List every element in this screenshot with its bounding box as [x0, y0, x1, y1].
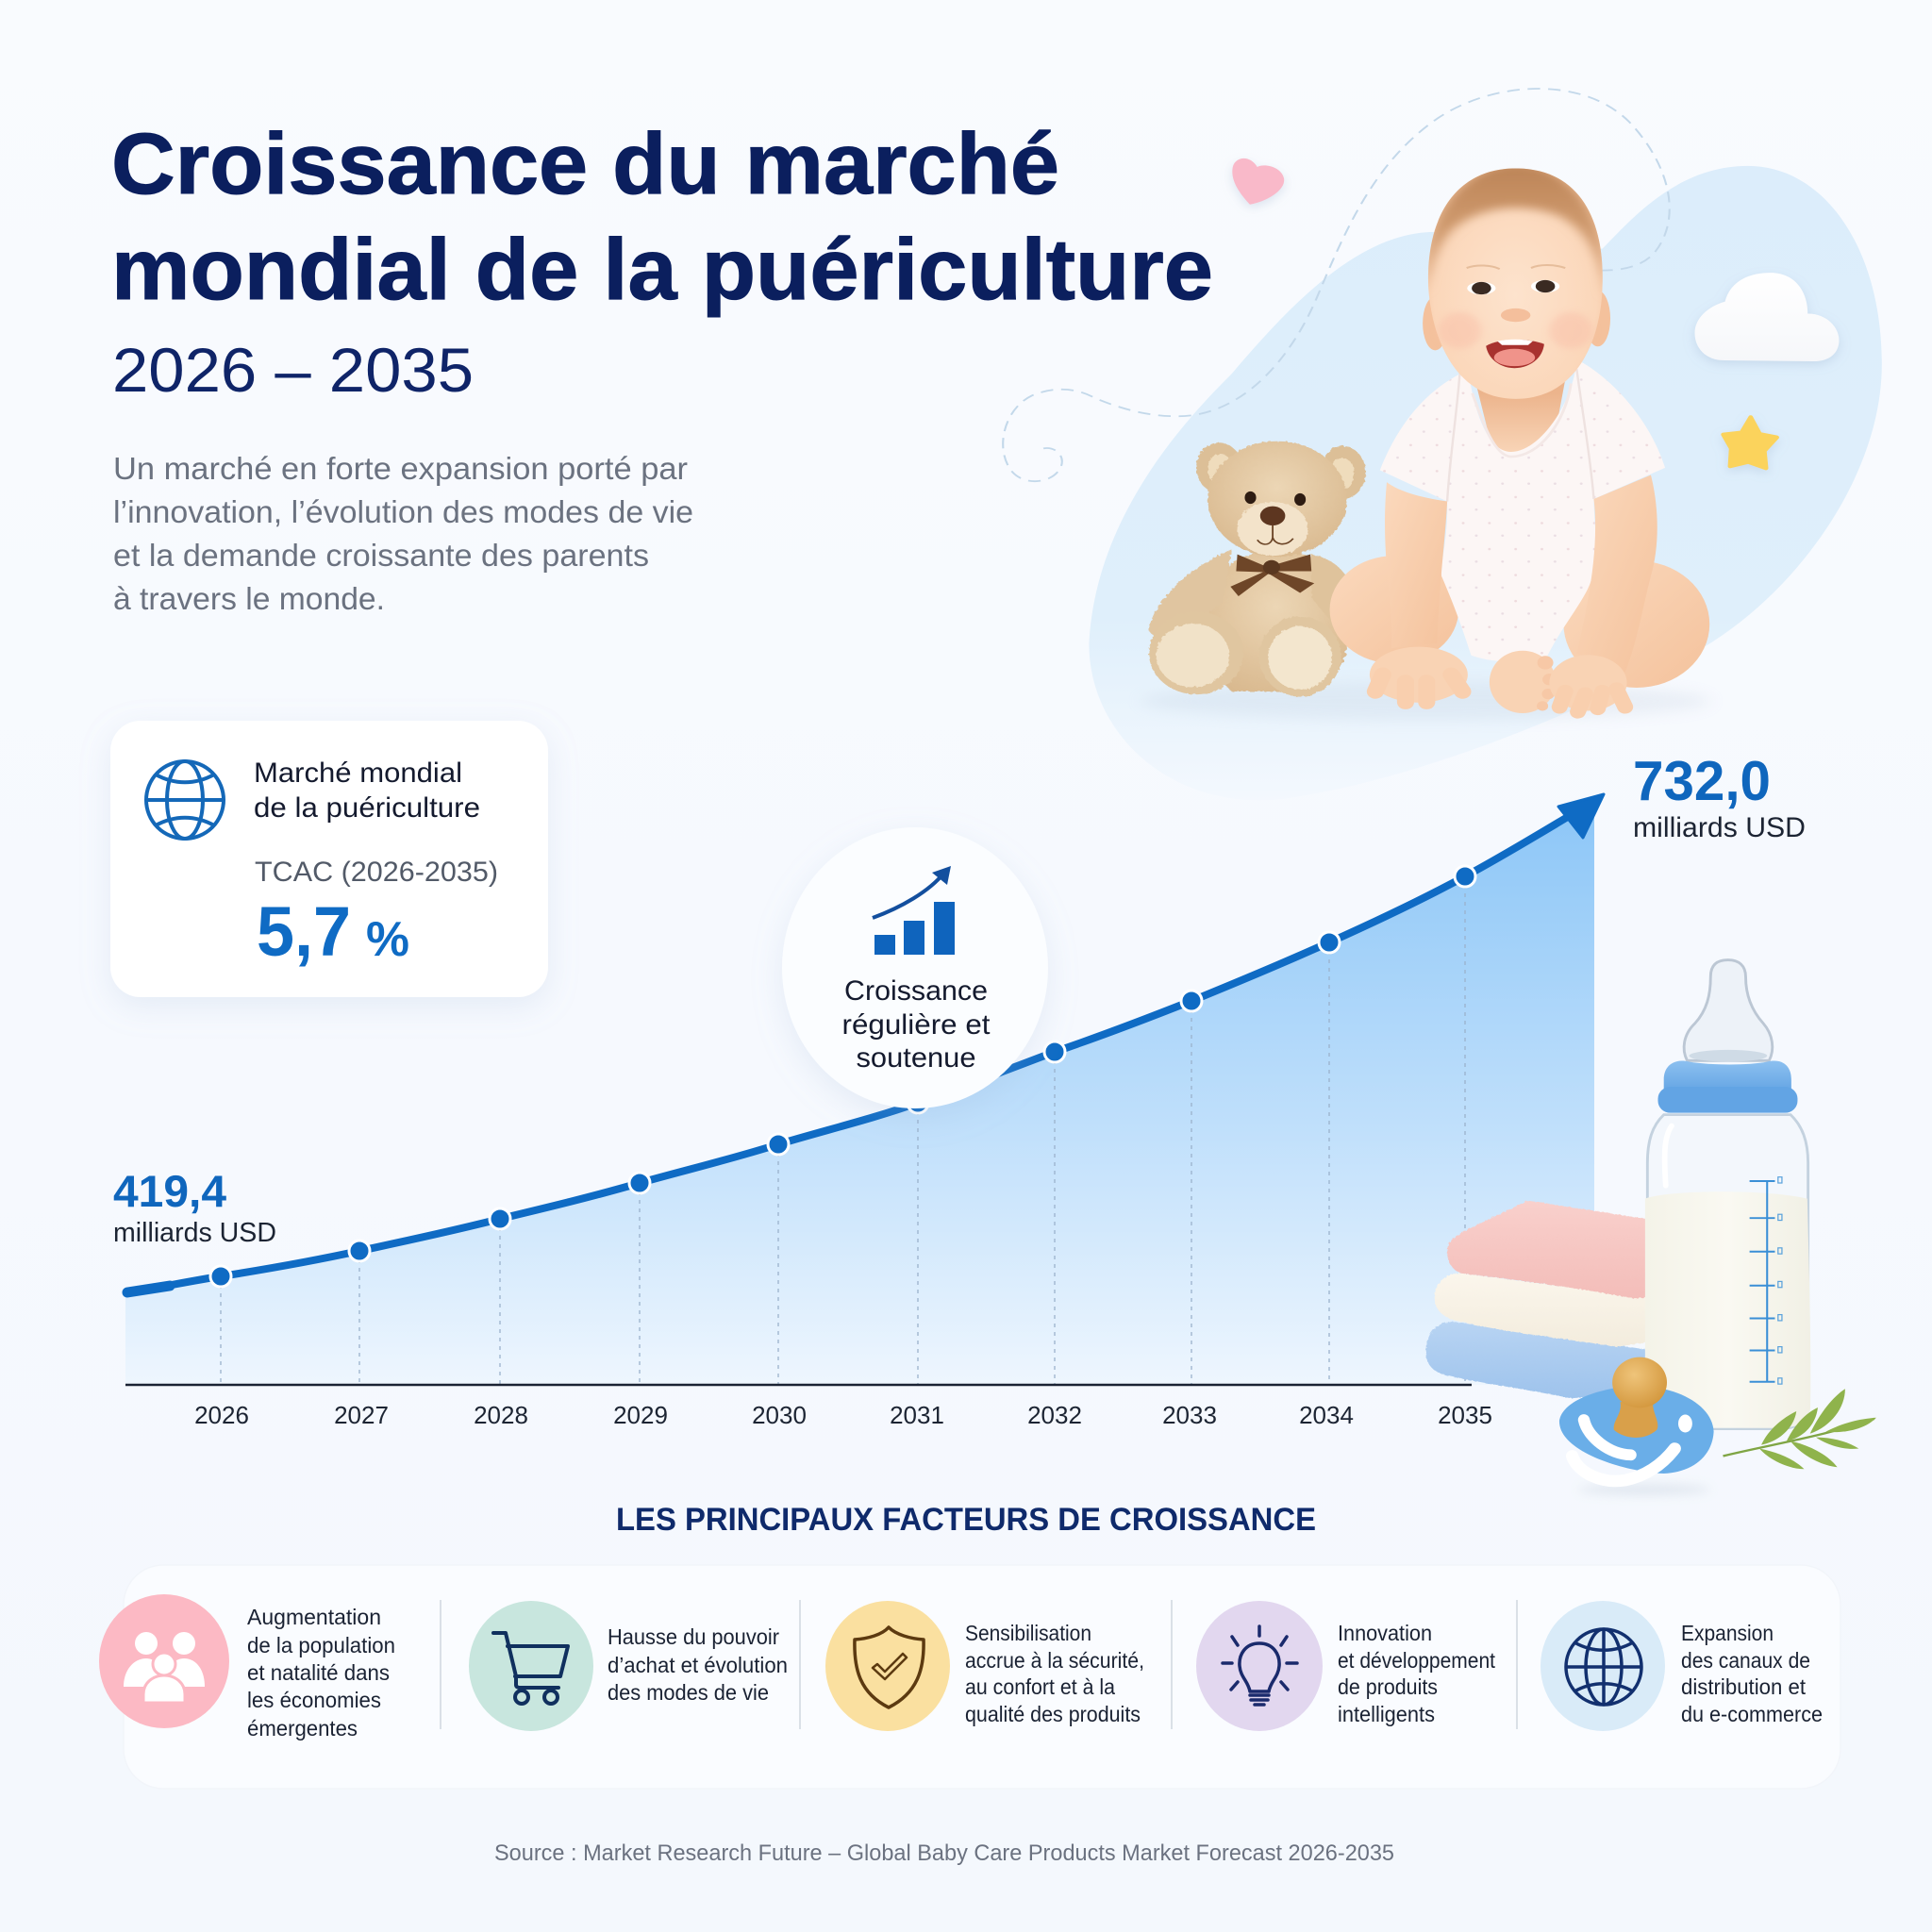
- card CAGR value: %: [366, 912, 409, 967]
- driver 2 text: d’achat et évolution: [608, 1653, 788, 1677]
- star: [1724, 417, 1777, 468]
- driver 1 text: [247, 1605, 395, 1740]
- driver 5 text: distribution et: [1681, 1674, 1807, 1699]
- end value: 732,0: [1633, 750, 1771, 812]
- driver 1: population: [99, 1594, 395, 1740]
- year labels: 2035: [1438, 1401, 1492, 1429]
- panel: growth drivers: [99, 1565, 1840, 1789]
- driver 5 text: Expansion: [1681, 1621, 1774, 1645]
- driver 5: distribution: [1541, 1601, 1823, 1731]
- source note: Source : Market Research Future – Global Baby Care Products Market Forecast 2026-2035: [494, 1840, 1394, 1866]
- year labels: 2032: [1027, 1401, 1082, 1429]
- card CAGR value: [257, 892, 409, 971]
- year labels: 2028: [474, 1401, 528, 1429]
- intro paragraph: à travers le monde.: [113, 581, 385, 616]
- driver 1 text: Augmentation: [247, 1605, 381, 1629]
- icon: people: [124, 1632, 205, 1703]
- pacifier: [1559, 1357, 1714, 1495]
- start value: [113, 1166, 276, 1248]
- cloud: [1694, 273, 1839, 361]
- driver 1 text: émergentes: [247, 1716, 358, 1740]
- growth line with arrow: [127, 794, 1604, 1292]
- title: [111, 116, 1213, 318]
- bottle: [1645, 960, 1810, 1429]
- chart data points: [210, 866, 1475, 1287]
- callout text: Croissance: [844, 975, 988, 1007]
- intro paragraph: et la demande croissante des parents: [113, 538, 649, 573]
- section heading: LES PRINCIPAUX FACTEURS DE CROISSANCE: [616, 1502, 1316, 1538]
- driver 5 text: [1681, 1621, 1823, 1726]
- year labels: [194, 1401, 1492, 1429]
- callout text: régulière et: [841, 1009, 991, 1041]
- intro paragraph: [113, 451, 693, 616]
- icon: globe: [146, 761, 224, 839]
- heart: [1232, 158, 1284, 205]
- icon: globe: [1566, 1629, 1641, 1705]
- driver 4 text: de produits: [1338, 1674, 1438, 1699]
- driver 4 text: [1338, 1621, 1496, 1726]
- baby: [1330, 162, 1709, 713]
- start value: 419,4: [113, 1166, 226, 1216]
- chart area fill: [125, 801, 1594, 1385]
- card label: Marché mondial: [254, 758, 462, 789]
- card: market CAGR: [110, 721, 548, 997]
- driver 4: innovation: [1196, 1601, 1496, 1731]
- card label: de la puériculture: [254, 792, 480, 824]
- callout text: [841, 975, 991, 1074]
- driver 3 text: [965, 1621, 1144, 1726]
- floor shadow: [1141, 682, 1710, 721]
- subtitle: years: 2026 – 2035: [112, 335, 474, 405]
- driver 5 text: des canaux de: [1681, 1648, 1810, 1673]
- callout text: soutenue: [857, 1042, 975, 1074]
- blue blob: [1089, 166, 1882, 800]
- year labels: 2034: [1299, 1401, 1354, 1429]
- illustration: baby with teddy: [1003, 89, 1882, 800]
- title: Croissance du marché: [111, 116, 1059, 212]
- year labels: 2029: [613, 1401, 668, 1429]
- driver 3 text: Sensibilisation: [965, 1621, 1091, 1645]
- driver 1 text: de la population: [247, 1633, 395, 1657]
- chart axis: [125, 1384, 1472, 1386]
- icon: shield: [855, 1627, 924, 1707]
- driver 3 text: qualité des produits: [965, 1702, 1141, 1726]
- end value: [1633, 750, 1806, 843]
- teddy bear: [1149, 441, 1366, 696]
- driver 4 text: et développement: [1338, 1648, 1496, 1673]
- illustration: bottle, towels, pacifier: [1426, 960, 1876, 1495]
- driver 3: safety: [825, 1601, 1144, 1731]
- year labels: 2026: [194, 1401, 249, 1429]
- driver 4 text: intelligents: [1338, 1702, 1435, 1726]
- driver 1 text: les économies: [247, 1688, 381, 1712]
- icon: light bulb: [1223, 1626, 1297, 1705]
- start value: milliards USD: [113, 1218, 276, 1248]
- icon: cart: [493, 1633, 568, 1704]
- dashed path: [1003, 89, 1670, 481]
- driver 3 text: au confort et à la: [965, 1674, 1115, 1699]
- teddy face: [1230, 491, 1314, 596]
- year labels: 2033: [1162, 1401, 1217, 1429]
- leaf sprig: [1724, 1389, 1876, 1469]
- title: mondial de la puériculture: [111, 222, 1213, 318]
- card label: [254, 758, 480, 824]
- card CAGR value: 5,7: [257, 892, 351, 971]
- year labels: 2027: [334, 1401, 389, 1429]
- chart drop lines: [221, 876, 1465, 1385]
- driver 4 text: Innovation: [1338, 1621, 1432, 1645]
- year labels: 2030: [752, 1401, 807, 1429]
- driver 1 text: et natalité dans: [247, 1660, 390, 1685]
- driver 2: purchasing power: [469, 1601, 788, 1731]
- callout bubble: steady growth: [782, 827, 1048, 1108]
- card CAGR label: TCAC (2026-2035): [255, 857, 498, 888]
- driver 3 text: accrue à la sécurité,: [965, 1648, 1144, 1673]
- towels: [1426, 1201, 1648, 1398]
- intro paragraph: l’innovation, l’évolution des modes de vie: [113, 494, 693, 529]
- year labels: 2031: [890, 1401, 944, 1429]
- end value: milliards USD: [1633, 812, 1806, 843]
- icon: rising bars: [873, 866, 955, 955]
- driver 5 text: du e-commerce: [1681, 1702, 1823, 1726]
- driver 2 text: des modes de vie: [608, 1680, 769, 1705]
- intro paragraph: Un marché en forte expansion porté par: [113, 451, 688, 486]
- driver 2 text: Hausse du pouvoir: [608, 1624, 779, 1649]
- driver 2 text: [608, 1624, 788, 1705]
